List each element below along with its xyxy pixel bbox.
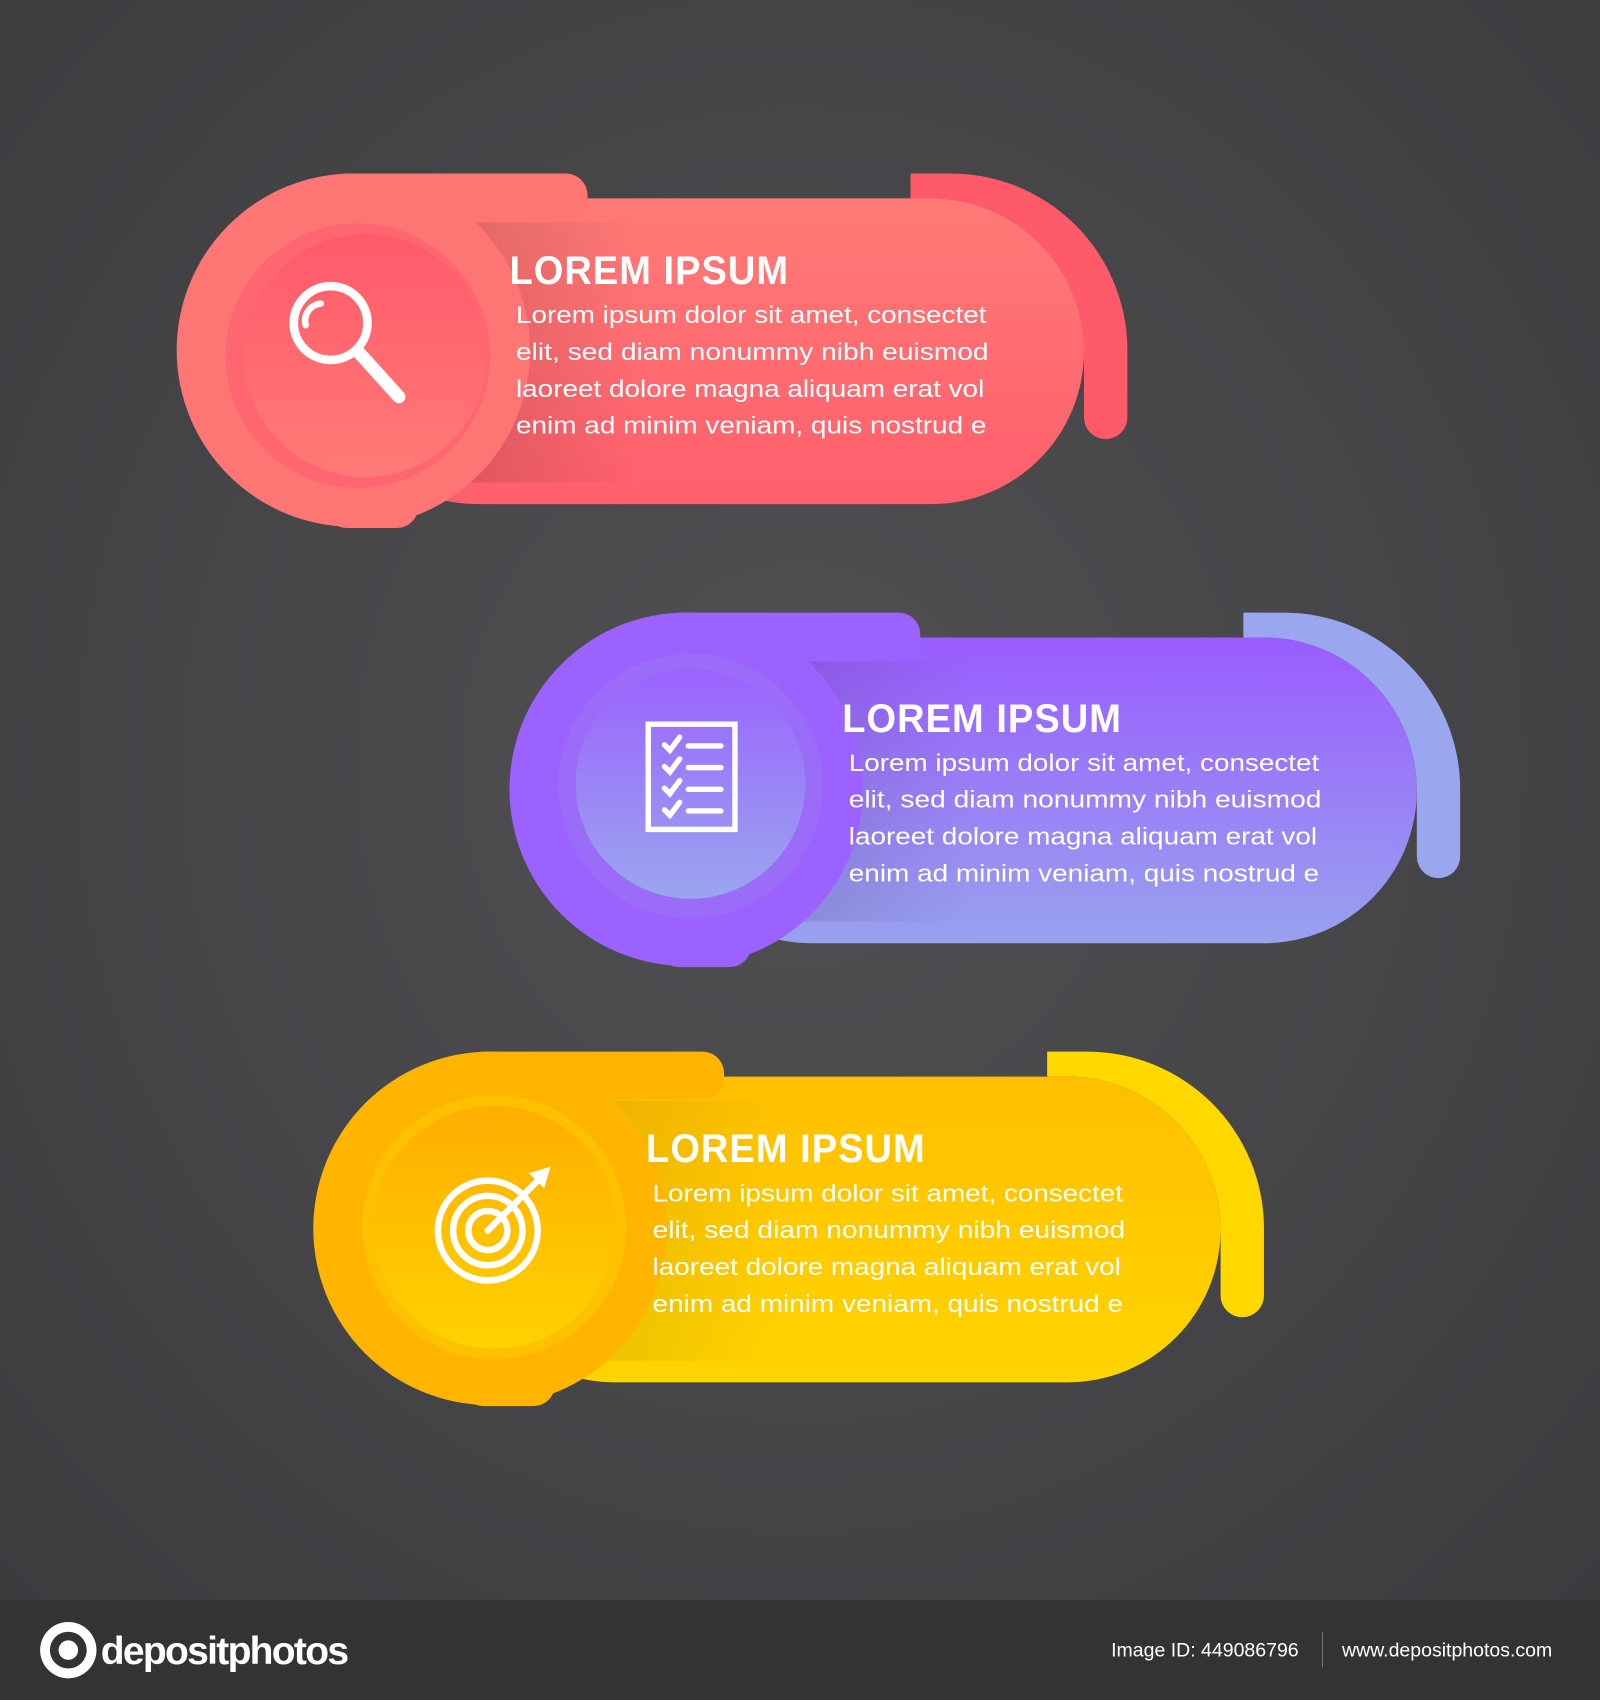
icon: logo xyxy=(40,1622,96,1678)
image id: Image ID: 449086796 xyxy=(1111,1640,1299,1662)
website: www.depositphotos.com xyxy=(1341,1640,1552,1662)
text block: Lorem ipsum dolor sit amet, consectet xyxy=(849,750,1320,777)
text block: enim ad minim veniam, quis nostrud e xyxy=(849,860,1319,887)
text block xyxy=(516,302,989,440)
panel: red card xyxy=(177,173,1127,528)
text block xyxy=(849,750,1321,887)
text block: elit, sed diam nonummy nibh euismod xyxy=(516,339,989,366)
heading: LOREM IPSUM xyxy=(842,697,1122,741)
text block: laoreet dolore magna aliquam erat vol xyxy=(516,376,984,403)
text block: elit, sed diam nonummy nibh euismod xyxy=(653,1217,1125,1244)
text block: laoreet dolore magna aliquam erat vol xyxy=(653,1254,1121,1281)
heading: LOREM IPSUM xyxy=(509,249,789,293)
panel: yellow card xyxy=(313,1052,1264,1406)
footer bar xyxy=(0,1600,1600,1700)
text block: laoreet dolore magna aliquam erat vol xyxy=(849,824,1317,851)
text block xyxy=(653,1180,1125,1318)
logo text: depositphotos xyxy=(101,1630,348,1673)
icon: checklist xyxy=(576,669,805,899)
heading: LOREM IPSUM xyxy=(646,1127,926,1171)
text block: Lorem ipsum dolor sit amet, consectet xyxy=(653,1180,1123,1207)
icon: target xyxy=(373,1106,616,1349)
text block: enim ad minim veniam, quis nostrud e xyxy=(516,413,986,440)
panel: purple card xyxy=(509,613,1460,967)
text block: enim ad minim veniam, quis nostrud e xyxy=(653,1291,1123,1318)
icon: magnifier xyxy=(244,234,487,477)
text block: elit, sed diam nonummy nibh euismod xyxy=(849,787,1321,814)
text block: Lorem ipsum dolor sit amet, consectet xyxy=(516,302,987,329)
